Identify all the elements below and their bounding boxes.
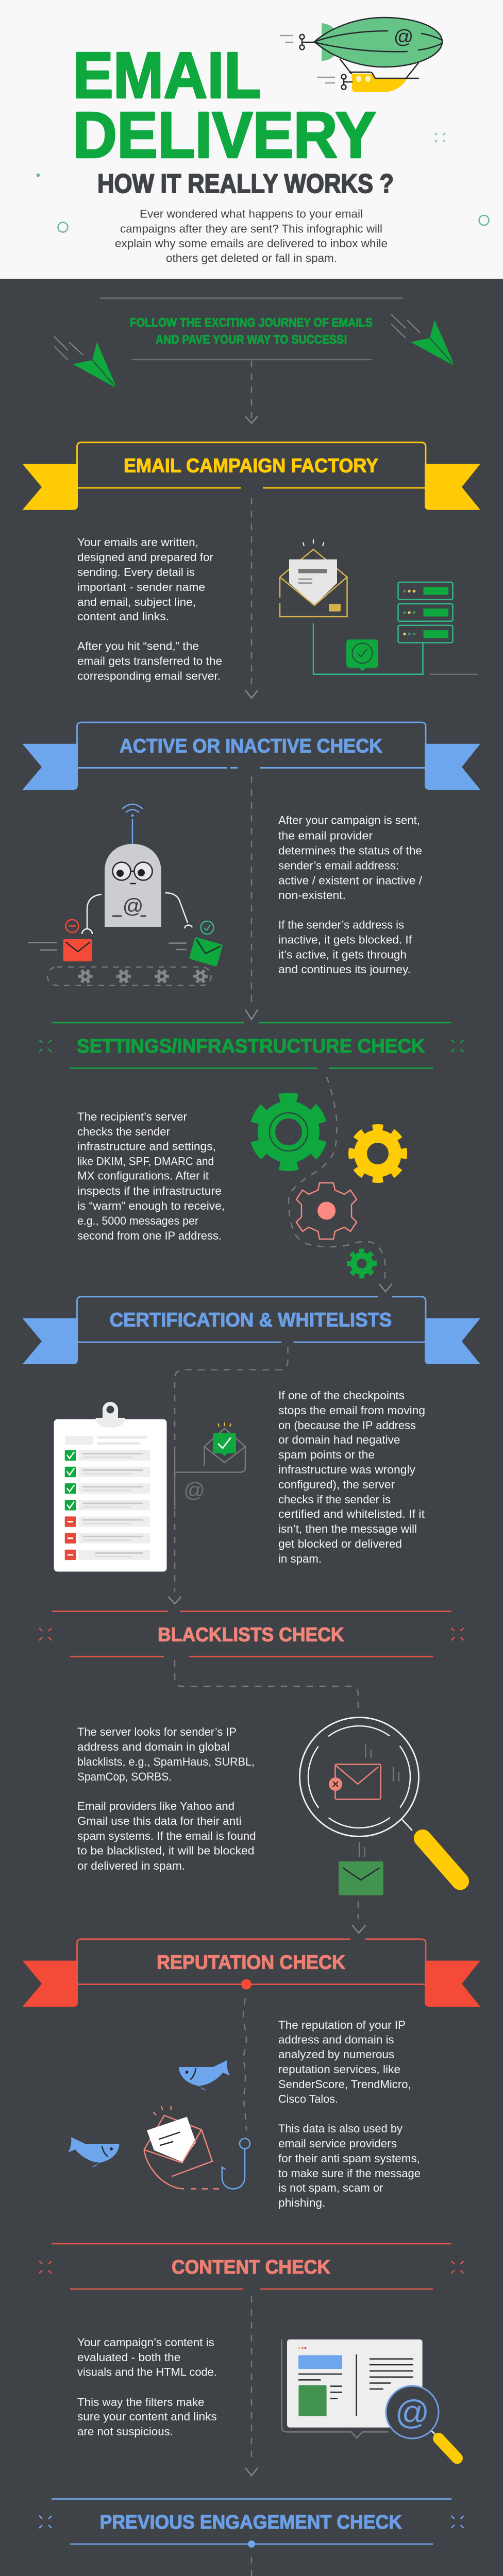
text: certification: or domain had negative [278,1433,400,1446]
heading: CERTIFICATION & WHITELISTS [110,1310,392,1331]
icon: server stack [313,582,478,674]
icon: yellow gear [352,1128,404,1179]
intro paragraph: explain why some emails are delivered to inbox while [115,237,388,250]
text: settings check: e.g., 5000 messages per [77,1214,198,1227]
text: campaign factory: important - sender name [77,581,205,594]
text: campaign factory: content and links. [77,610,169,623]
text: certification: get blocked or delivered [278,1537,402,1550]
text: content check: Your campaign’s content is [77,2336,214,2349]
heading: BLACKLISTS CHECK [158,1624,344,1646]
text: certification [278,1389,425,1565]
text: active or inactive: determines the status of the [278,844,422,857]
text: campaign factory: designed and prepared for [77,551,213,564]
icon: small green gear [349,1251,374,1276]
text: settings check: MX configurations. After it [77,1170,209,1182]
text: active or inactive: If the sender’s address is [278,919,404,931]
arrow: down to sorting hub [251,2557,252,2576]
text: campaign factory: and email, subject line, [77,596,196,608]
intro paragraph: Ever wondered what happens to your email [140,207,363,221]
icon: accepted envelope [169,921,223,967]
icon: open envelope [280,539,347,617]
intro call to action [54,298,455,388]
text: certification: spam points or the [278,1448,375,1461]
hero title block [73,39,394,265]
illustration: content review page [281,2340,457,2458]
text: certification: certified and whitelisted. If it [278,1507,425,1520]
text: settings check: The recipient’s server [77,1110,187,1123]
text: blacklists: to be blacklisted, it will be blocked [77,1844,255,1857]
text: certification: stops the email from moving [278,1404,425,1417]
icon: large green gear [243,1086,334,1178]
icon: top fish [179,2060,230,2090]
arrow: blacklist path [175,1660,366,1933]
decorative sparkle and dots [36,133,489,232]
text: content check: sure your content and links [77,2410,217,2423]
icon: rejected envelope [28,920,92,961]
text: campaign factory: email gets transferred to the [77,655,222,668]
heading: PREVIOUS ENGAGEMENT CHECK [100,2512,403,2533]
text: reputation: reputation services, like [278,2063,400,2076]
arrow: winding path through gears [289,1077,392,1292]
text: reputation: This data is also used by [278,2122,403,2135]
text: campaign factory: Your emails are written, [77,536,198,549]
text: reputation: email service providers [278,2137,397,2150]
heading band: settings infrastructure check [39,1023,464,1069]
icon: certified badge [213,1422,236,1456]
text: blacklists: SpamCop, SORBS. [77,1770,172,1783]
text: settings check [77,1110,225,1242]
text: settings check: infrastructure and settings, [77,1140,216,1153]
heading band: previous engagement check [39,2499,464,2548]
text: settings check: second from one IP address. [77,1229,222,1242]
text: active or inactive: and continues its journey. [278,963,411,976]
arrow: wavy fishing line [243,1998,246,2130]
text: active or inactive: non-existent. [278,889,346,902]
text: blacklists: address and domain in global [77,1740,230,1753]
text: blacklists: or delivered in spam. [77,1859,185,1872]
text: certification: configured), the server [278,1478,395,1491]
conveyor belt [47,967,211,986]
text: active or inactive: active / existent or inactive / [278,874,423,887]
icon: phishing envelope on hook [144,2106,250,2189]
illustration: address checking robot [28,804,223,986]
checklist rows [65,1450,150,1560]
icon: green envelope [339,1861,383,1895]
text: certification: If one of the checkpoints [278,1389,405,1402]
icon: fishing hook [222,2139,250,2189]
text: reputation [278,2019,421,2209]
text: blacklists: Email providers like Yahoo and [77,1800,234,1812]
text: active or inactive: sender’s email address: [278,859,399,872]
heading band: blacklists check [39,1612,464,1656]
text: blacklists: Gmail use this data for their anti [77,1815,242,1827]
text: settings check: like DKIM, SPF, DMARC and [77,1155,214,1168]
text: blacklists [77,1725,256,1872]
icon: check badge [346,639,378,671]
arrow: active check to settings [245,776,258,1020]
text: content check: evaluated - both the [77,2351,180,2364]
text: content check [77,2336,217,2438]
text: reputation: address and domain is [278,2033,394,2046]
icon: salmon outline gear [296,1183,357,1239]
heading: SETTINGS/INFRASTRUCTURE CHECK [77,1036,425,1057]
text: settings check: checks the sender [77,1125,170,1138]
arrow: content to previous engagement [245,2296,258,2476]
call to action text: AND PAVE YOUR WAY TO SUCCESS! [156,333,347,347]
text: active or inactive [278,814,423,976]
text: reputation: analyzed by numerous [278,2048,394,2061]
text: campaign factory [77,536,222,682]
intro paragraph: others get deleted or fall in spam. [166,252,337,265]
icon: at sign: @ [183,1478,205,1502]
arrow: into campaign factory [245,361,258,423]
icon: magnifier over envelope [300,1718,460,1882]
heading: ACTIVE OR INACTIVE CHECK [120,736,383,757]
heading: CONTENT CHECK [172,2257,331,2278]
text: reputation: SenderScore, TrendMicro, [278,2078,411,2091]
intro paragraph: campaigns after they are sent? This infographic will [120,223,382,235]
text: active or inactive: inactive, it gets blocked. If [278,934,412,946]
text: reputation: for their anti spam systems, [278,2152,420,2165]
illustration: checklist clipboard [54,1402,166,1571]
banner: email campaign factory [23,443,480,510]
icon: airship [280,18,442,92]
subtitle: HOW IT REALLY WORKS ? [97,169,394,199]
icon: magnifier with at sign [386,2386,457,2458]
icon: right paper plane [391,314,455,366]
call to action text [130,316,373,347]
text: content check: This way the filters make [77,2396,204,2409]
text: campaign factory: After you hit “send,” the [77,640,199,653]
text: blacklists: spam systems. If the email is found [77,1829,256,1842]
icon: magnifier with at sign: @ [395,2393,430,2431]
banner: certification and whitelists [23,1297,480,1364]
robot body [82,844,192,934]
text: campaign factory: corresponding email server. [77,670,221,682]
arrow: factory to active check [245,498,258,698]
banner: reputation check [23,1939,480,2007]
icon: wifi signal [122,804,143,844]
text: active or inactive: After your campaign is sent, [278,814,420,826]
text: campaign factory: sending. Every detail is [77,566,195,579]
title: email delivery [73,39,376,171]
text: certification: checks if the sender is [278,1493,391,1506]
text: reputation: The reputation of your IP [278,2019,406,2031]
text: settings check: is “warm” enough to receive, [77,1199,225,1212]
text: certification: on (because the IP address [278,1419,416,1432]
text: reputation: phishing. [278,2196,326,2209]
intro paragraph [115,207,388,265]
title: email delivery: DELIVERY [73,99,376,171]
text: certification: in spam. [278,1552,322,1565]
call to action text: FOLLOW THE EXCITING JOURNEY OF EMAILS [130,316,373,330]
text: certification: isn’t, then the message will [278,1522,417,1535]
text: active or inactive: the email provider [278,829,373,842]
icon: bottom fish [68,2137,120,2167]
heading: EMAIL CAMPAIGN FACTORY [124,455,378,477]
icon: left paper plane [54,336,117,388]
arrow: certification path [169,1347,288,1604]
text: settings check: inspects if the infrastructure [77,1184,222,1197]
text: reputation: Cisco Talos. [278,2093,338,2106]
heading: REPUTATION CHECK [157,1952,346,1973]
text: content check: visuals and the HTML code. [77,2366,217,2379]
text: blacklists: The server looks for sender’s IP [77,1725,237,1738]
text: reputation: is not spam, scam or [278,2181,383,2194]
heading band: content check [39,2244,464,2289]
text: certification: infrastructure was wrongly [278,1463,415,1476]
text: active or inactive: it’s active, it gets through [278,948,407,961]
icon: airship: @ [394,26,413,48]
banner: active or inactive check [23,722,480,790]
text: reputation: to make sure if the message [278,2167,421,2180]
title: email delivery: EMAIL [73,39,261,111]
text: content check: are not suspicious. [77,2425,173,2438]
robot body: @ [123,895,143,918]
text: blacklists: blacklists, e.g., SpamHaus, SURBL, [77,1755,255,1768]
